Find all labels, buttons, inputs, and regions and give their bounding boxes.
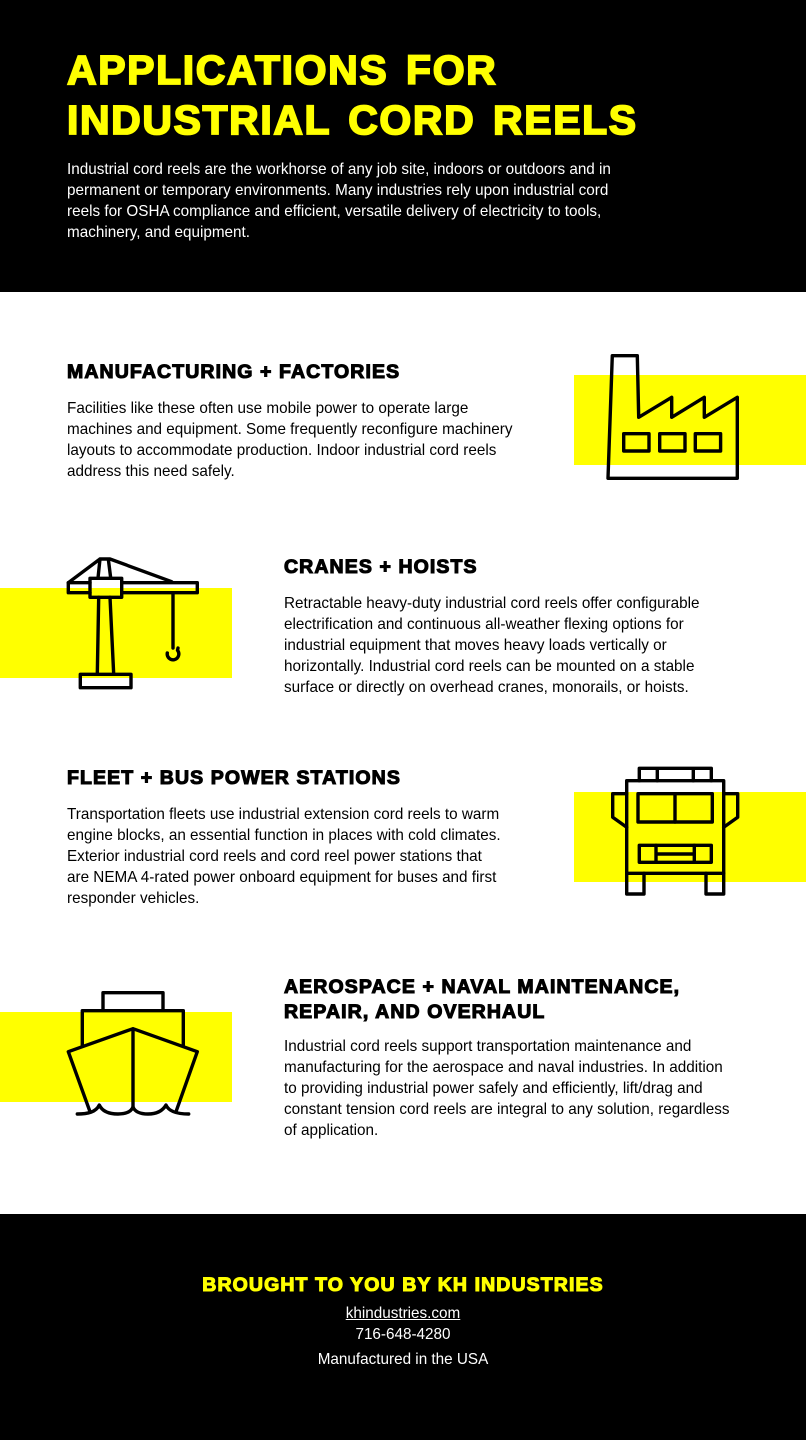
intro text: Industrial cord reels are the workhorse of any job site, indoors or outdoors and in	[67, 161, 611, 178]
text: manufacturing	[67, 400, 512, 480]
heading: fleet: FLEET + BUS POWER STATIONS	[67, 767, 401, 789]
intro text: machinery, and equipment.	[67, 224, 250, 241]
footer phone: 716-648-4280	[355, 1326, 451, 1343]
footer heading: BROUGHT TO YOU BY KH INDUSTRIES	[202, 1274, 604, 1296]
text: manufacturing: machines and equipment. Some frequently reconfigure machinery	[67, 421, 512, 438]
yellow band: aerospace	[0, 1012, 232, 1102]
text: aerospace: of application.	[284, 1122, 378, 1139]
text: cranes	[284, 595, 700, 696]
heading: manufacturing: MANUFACTURING + FACTORIES	[67, 361, 400, 383]
text: aerospace: constant tension cord reels are integral to any solution, regardless	[284, 1101, 730, 1118]
heading: aerospace	[284, 976, 680, 1023]
text: cranes: electrification and continuous all-weather flexing options for	[284, 616, 684, 633]
yellow band: manufacturing	[574, 375, 806, 465]
text: fleet: are NEMA 4-rated power onboard equipment for buses and first	[67, 869, 496, 886]
text: cranes: Retractable heavy-duty industrial cord reels offer configurable	[284, 595, 700, 612]
heading: aerospace: REPAIR, AND OVERHAUL	[284, 1001, 545, 1023]
footer note: Manufactured in the USA	[318, 1351, 488, 1368]
title: APPLICATIONS FOR	[67, 47, 497, 93]
text: aerospace	[284, 1038, 730, 1139]
title	[66, 47, 638, 143]
text: fleet: Transportation fleets use industrial extension cord reels to warm	[67, 806, 499, 823]
panel: footer	[0, 1214, 806, 1440]
panel: header	[0, 0, 806, 292]
heading: cranes: CRANES + HOISTS	[284, 556, 478, 578]
yellow band: cranes	[0, 588, 232, 678]
text: aerospace: Industrial cord reels support transportation maintenance and	[284, 1038, 691, 1055]
yellow band: fleet	[574, 792, 806, 882]
text: cranes: surface or directly on overhead cranes, monorails, or hoists.	[284, 679, 689, 696]
heading: aerospace: AEROSPACE + NAVAL MAINTENANCE,	[284, 976, 680, 998]
intro text: reels for OSHA compliance and efficient, versatile delivery of electricity to tools,	[67, 203, 601, 220]
intro text	[67, 161, 611, 241]
text: fleet: engine blocks, an essential function in places with cold climates.	[67, 827, 501, 844]
intro text: permanent or temporary environments. Many industries rely upon industrial cord	[67, 182, 608, 199]
text: fleet: Exterior industrial cord reels and cord reel power stations that	[67, 848, 482, 865]
text: aerospace: manufacturing for the aerospace and naval industries. In addition	[284, 1059, 723, 1076]
text: fleet: responder vehicles.	[67, 890, 199, 907]
text: manufacturing: layouts to accommodate production. Indoor industrial cord reels	[67, 442, 496, 459]
text: manufacturing: Facilities like these often use mobile power to operate large	[67, 400, 468, 417]
text: fleet	[67, 806, 501, 907]
text: cranes: horizontally. Industrial cord reels can be mounted on a stable	[284, 658, 694, 675]
text: aerospace: to providing industrial power safely and efficiently, lift/drag and	[284, 1080, 703, 1097]
footer link: khindustries.com	[346, 1305, 460, 1322]
text: cranes: industrial equipment that moves heavy loads vertically or	[284, 637, 667, 654]
title: INDUSTRIAL CORD REELS	[67, 97, 638, 143]
text: manufacturing: address this need safely.	[67, 463, 235, 480]
